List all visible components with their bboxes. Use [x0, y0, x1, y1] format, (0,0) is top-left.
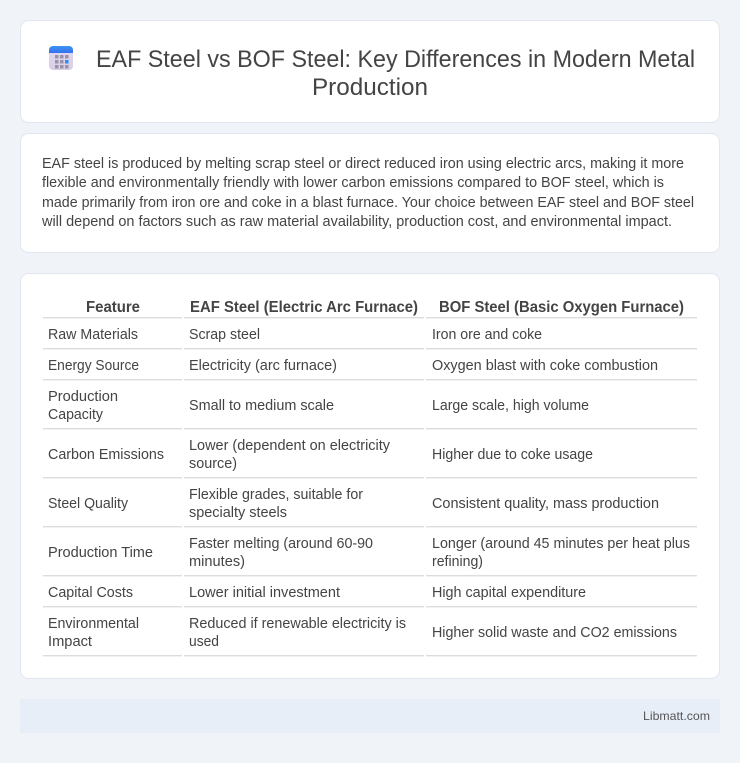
panel: intro text card: flexible and environmentally friendly with lower carbon emissions compared to BOF steel, which is — [42, 175, 664, 191]
row: energy source: Oxygen blast with coke combustion — [432, 358, 658, 374]
title: Production — [312, 74, 428, 101]
panel: intro text card: EAF steel is produced by melting scrap steel or direct reduced iron using electric arcs, making it more — [42, 156, 684, 172]
table header: Feature — [86, 299, 140, 316]
row: raw materials — [43, 327, 697, 349]
row: steel quality: specialty steels — [189, 505, 287, 521]
row: production capacity: Small to medium scale — [189, 398, 334, 414]
panel: intro text card — [20, 134, 720, 252]
row: production capacity: Large scale, high volume — [432, 398, 589, 414]
row: capital costs: Lower initial investment — [189, 585, 340, 601]
row: production time: Production Time — [48, 545, 153, 561]
row: production time — [43, 536, 697, 576]
title — [96, 46, 695, 101]
row: capital costs: High capital expenditure — [432, 585, 586, 601]
row: carbon emissions: Lower (dependent on electricity — [189, 438, 391, 454]
row: carbon emissions: source) — [189, 456, 237, 472]
table header — [43, 299, 697, 318]
footer: Libmatt.com — [643, 709, 710, 723]
row: production time: minutes) — [189, 554, 245, 570]
panel: intro text card: made primarily from iron ore and coke in a blast furnace. Your choice between EAF steel and BOF steel — [42, 195, 694, 211]
row: raw materials: Raw Materials — [48, 327, 138, 343]
row: energy source — [43, 358, 697, 380]
icon: calendar — [49, 46, 73, 70]
row: steel quality: Flexible grades, suitable for — [189, 487, 363, 503]
row: production capacity: Capacity — [48, 407, 104, 423]
row: production time: Longer (around 45 minutes per heat plus — [432, 536, 690, 552]
row: environmental impact: Environmental — [48, 616, 139, 632]
panel: intro text card: will depend on factors such as raw material availability, production cost, and environmental impact. — [41, 214, 672, 230]
row: raw materials: Iron ore and coke — [432, 327, 542, 343]
panel: title card — [20, 20, 720, 122]
row: carbon emissions — [43, 438, 697, 478]
row: production time: refining) — [432, 554, 483, 570]
row: production capacity: Production — [48, 389, 118, 405]
row: environmental impact: Impact — [48, 634, 92, 650]
row: carbon emissions: Carbon Emissions — [48, 447, 164, 463]
row: capital costs: Capital Costs — [48, 585, 133, 601]
row: energy source: Electricity (arc furnace) — [189, 358, 337, 374]
row: energy source: Energy Source — [48, 358, 139, 374]
title: EAF Steel vs BOF Steel: Key Differences in Modern Metal — [96, 46, 695, 73]
row: environmental impact: Higher solid waste and CO2 emissions — [432, 625, 677, 641]
row: capital costs — [43, 585, 697, 607]
row: production time: Faster melting (around 60-90 — [189, 536, 373, 552]
table header: EAF Steel (Electric Arc Furnace) — [190, 299, 418, 316]
row: environmental impact: Reduced if renewable electricity is — [189, 616, 406, 632]
row: environmental impact: used — [189, 634, 219, 650]
table header: BOF Steel (Basic Oxygen Furnace) — [439, 299, 684, 316]
row: carbon emissions: Higher due to coke usage — [432, 447, 593, 463]
row: environmental impact — [43, 616, 697, 656]
row: steel quality: Steel Quality — [48, 496, 129, 512]
row: production capacity — [43, 389, 697, 429]
footer — [20, 699, 720, 733]
row: raw materials: Scrap steel — [189, 327, 260, 343]
panel: comparison table — [20, 274, 720, 678]
row: steel quality — [43, 487, 697, 527]
row: steel quality: Consistent quality, mass production — [432, 496, 659, 512]
